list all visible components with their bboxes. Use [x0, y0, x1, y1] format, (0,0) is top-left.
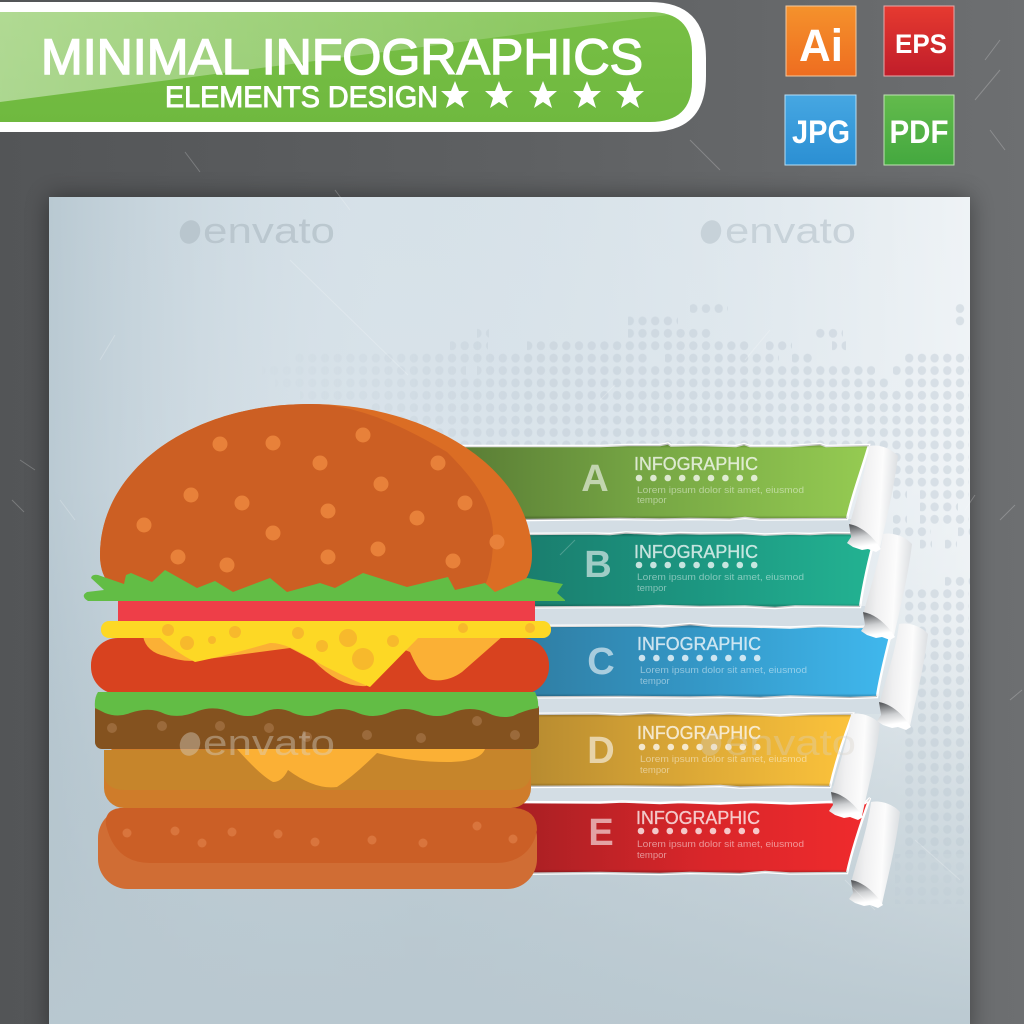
band D body text [640, 754, 807, 776]
band A body text: Lorem ipsum dolor sit amet, eiusmod [637, 485, 804, 496]
band E heading: INFOGRAPHIC [636, 808, 760, 828]
orange cheese behind [143, 636, 503, 686]
watermark: envato top left: envato [203, 210, 335, 251]
panel: infographic sheet [49, 197, 970, 1024]
watermark: envato top left [176, 210, 335, 251]
band E body text: tempor [637, 850, 667, 861]
band D body text: tempor [640, 765, 670, 776]
band E: red [500, 798, 870, 874]
band A body text: tempor [637, 495, 667, 506]
cheese slice band [101, 621, 551, 687]
band B body text [637, 572, 804, 594]
lower lettuce [95, 692, 538, 717]
band A dot row [636, 475, 758, 481]
band E body text [637, 839, 804, 861]
band C body text: tempor [640, 676, 670, 687]
band D: yellow [500, 713, 853, 788]
band C: blue [500, 624, 893, 698]
peeled paper curl A [847, 446, 898, 552]
gaps between bands [530, 519, 880, 803]
top lettuce [84, 570, 565, 601]
tomato [118, 601, 535, 621]
watermark: envato over burger [176, 722, 335, 763]
rating stars [441, 81, 644, 108]
band B heading: INFOGRAPHIC [634, 542, 758, 562]
red meat layer [91, 638, 549, 694]
panel lower shading [49, 620, 970, 1024]
dotted world map [436, 304, 970, 854]
band D heading: INFOGRAPHIC [637, 723, 761, 743]
band B body text: Lorem ipsum dolor sit amet, eiusmod [637, 572, 804, 583]
watermark: envato over burger: envato [203, 722, 335, 763]
band B dot row [636, 562, 758, 568]
band E letter: E [588, 812, 614, 854]
watermark: envato over band D: envato [725, 722, 856, 763]
header subtitle: ELEMENTS DESIGN [165, 81, 438, 114]
watermark: envato top right [697, 210, 856, 251]
band A heading: INFOGRAPHIC [634, 454, 758, 474]
band D body text: Lorem ipsum dolor sit amet, eiusmod [640, 754, 807, 765]
band D dot row [639, 744, 760, 750]
middle bun [104, 745, 531, 808]
band E dot row [638, 828, 760, 834]
band A body text [637, 485, 804, 506]
peeled paper curl C [877, 624, 928, 730]
icon: JPG format: JPG [792, 114, 850, 150]
icon: JPG format [785, 95, 856, 165]
peeled paper curl D [829, 714, 880, 820]
top bun [100, 404, 532, 594]
band B body text: tempor [637, 583, 667, 594]
header banner [0, 2, 706, 132]
burger illustration [84, 404, 565, 889]
watermark: envato over band D [697, 722, 856, 763]
band E body text: Lorem ipsum dolor sit amet, eiusmod [637, 839, 804, 850]
patty [95, 702, 539, 749]
icon: EPS format: EPS [895, 29, 947, 59]
band C letter: C [587, 641, 615, 683]
band C dot row [639, 655, 760, 661]
band D letter: D [587, 730, 615, 772]
band B letter: B [584, 544, 612, 586]
peeled paper curl E [849, 802, 900, 908]
bottom bun [98, 808, 537, 889]
icon: EPS format [884, 6, 954, 76]
icon: Ai format [786, 6, 856, 76]
band A: green [462, 444, 869, 520]
icon: PDF format [884, 95, 954, 165]
band B: teal [500, 532, 876, 608]
watermark: envato top right: envato [725, 210, 856, 251]
band C body text [640, 665, 807, 687]
header title: MINIMAL INFOGRAPHICS [41, 29, 643, 85]
band C body text: Lorem ipsum dolor sit amet, eiusmod [640, 665, 807, 676]
band A letter: A [581, 458, 609, 500]
icon: PDF format: PDF [890, 114, 948, 150]
band C heading: INFOGRAPHIC [637, 634, 761, 654]
peeled paper curl B [861, 534, 912, 640]
icon: Ai format: Ai [799, 20, 843, 71]
